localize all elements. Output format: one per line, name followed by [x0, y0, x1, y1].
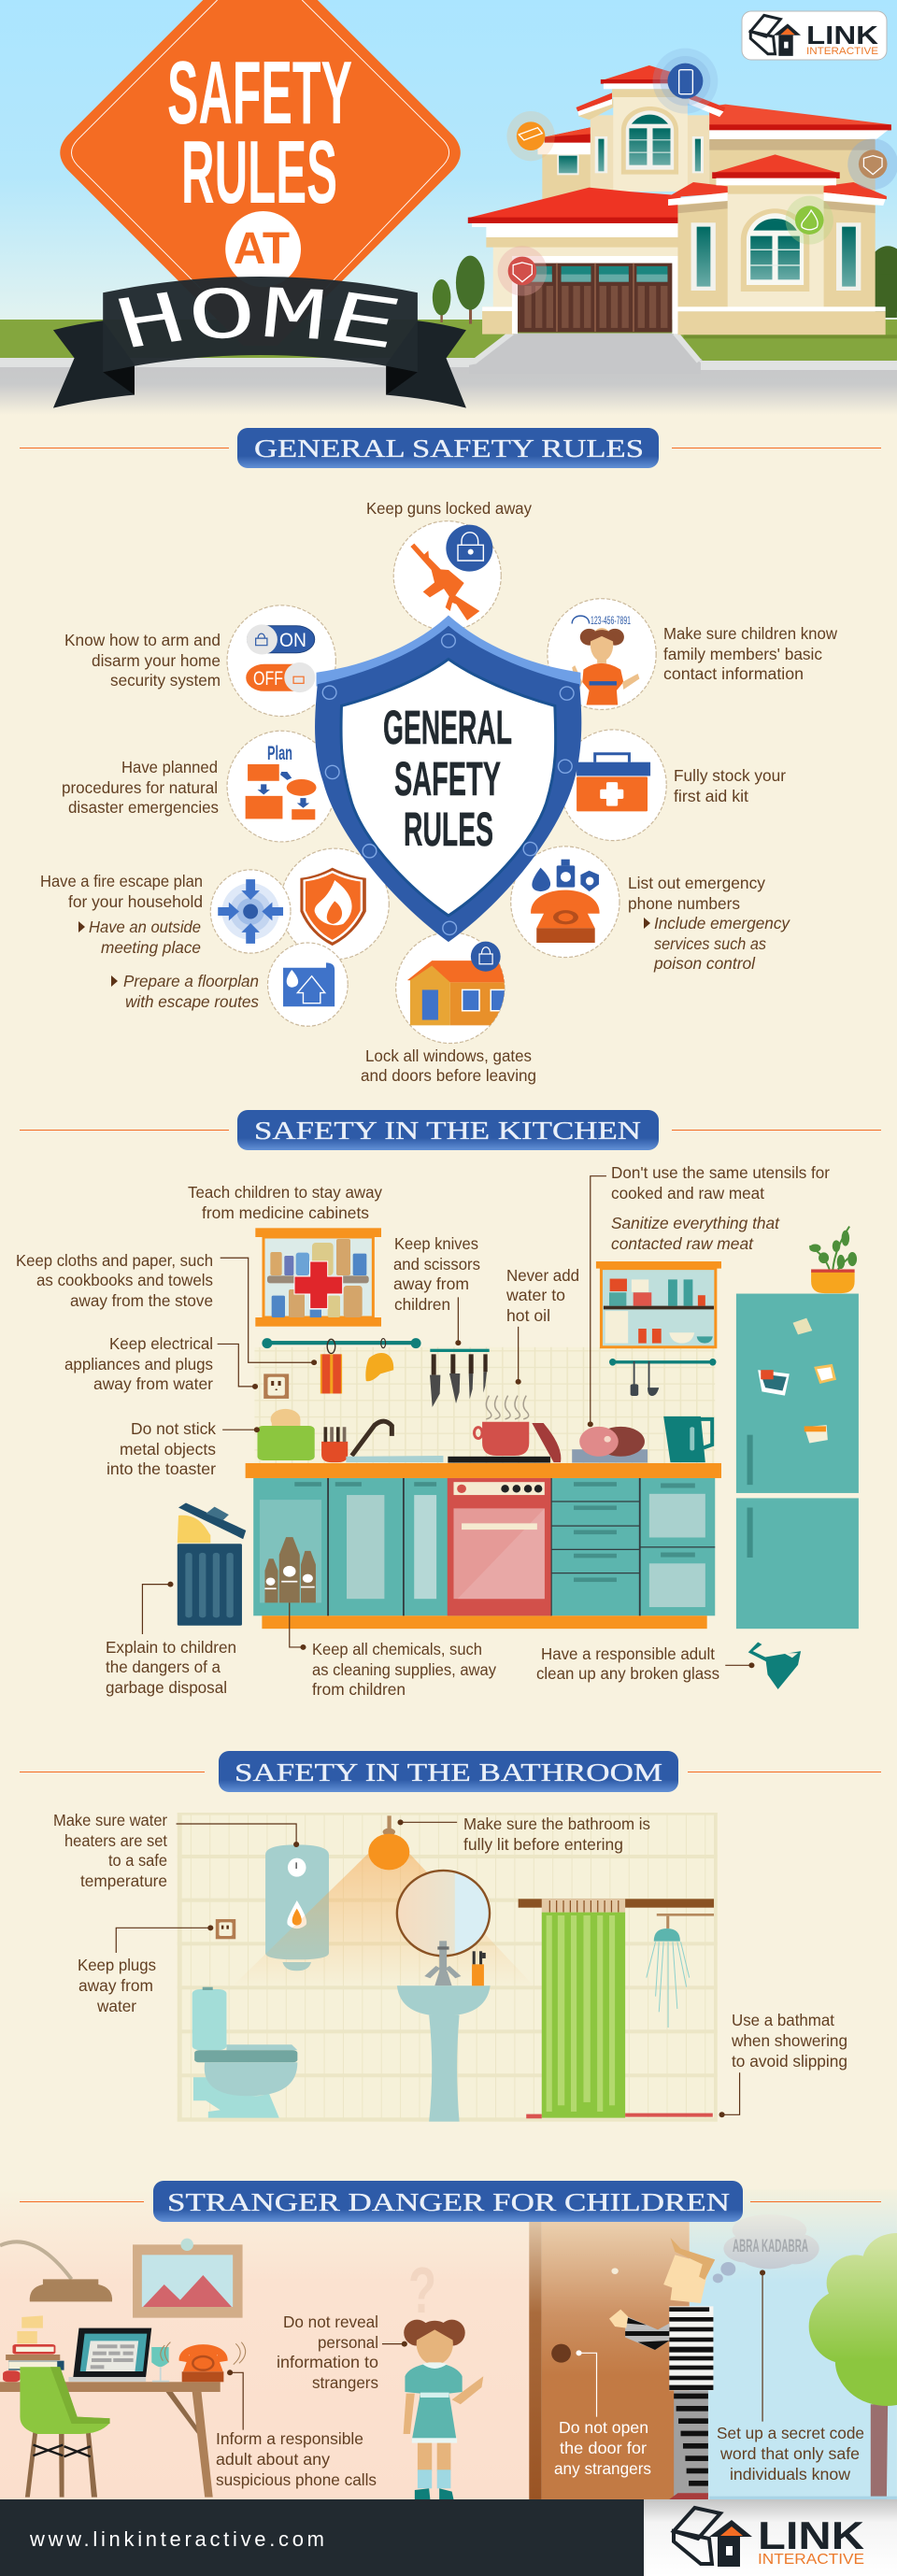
- heading: stranger danger: [20, 2181, 881, 2222]
- text: electrical appliances: Keep electrical: [109, 1334, 213, 1353]
- text: water heaters: Make sure water: [53, 1811, 167, 1829]
- text: do not open the door: Do not open: [559, 2418, 648, 2437]
- text: do not open the door: [554, 2418, 651, 2478]
- tile wall: [254, 1347, 715, 1463]
- panel: kitchen: [16, 1110, 881, 1699]
- icon labels: on off plan phone number: OFF: [253, 668, 283, 690]
- icon labels: on off plan phone number: ON: [279, 630, 306, 651]
- icon: broken glass: [748, 1642, 801, 1689]
- text: emergency phone numbers: [628, 874, 790, 973]
- text: first aid kit: [674, 766, 786, 805]
- icon: phone: [653, 49, 718, 114]
- text: contact information: Make sure children know: [663, 624, 837, 643]
- glass and telephone: [151, 2342, 246, 2382]
- icon: gun locked: [393, 521, 501, 631]
- books and mugs: [3, 2315, 64, 2382]
- knife block and sink: [321, 1421, 443, 1462]
- text: fire escape plan: Have a fire escape plan: [40, 872, 203, 890]
- icon: green fire: [786, 196, 833, 245]
- text: secret code: individuals know: [730, 2465, 850, 2483]
- text: bathmat: when showering: [731, 2031, 847, 2050]
- house: tower: [576, 65, 725, 192]
- text: planned procedures: Have planned: [121, 758, 218, 776]
- icon: first aid kit: [560, 730, 666, 841]
- text: emergency phone numbers: Include emergency: [654, 914, 790, 932]
- text: chemicals: [312, 1640, 496, 1699]
- house: back wing: [537, 127, 600, 203]
- text: bathmat: [731, 2011, 847, 2071]
- road and lawn: [0, 320, 897, 415]
- text: keep plugs: [78, 1956, 156, 2015]
- text: utensils: Sanitize everything that: [611, 1214, 780, 1232]
- title text: safety rules at: [167, 43, 352, 274]
- title text: safety rules at: AT: [234, 224, 290, 274]
- laptop: [68, 2328, 151, 2382]
- text: contact information: contact information: [663, 664, 804, 683]
- mirror: [397, 1871, 490, 1956]
- text: secret code: Set up a secret code: [717, 2424, 864, 2442]
- title text: safety rules at: RULES: [181, 122, 337, 222]
- illustration: bathroom: [116, 1813, 740, 2122]
- text: cloths and paper: away from the stove: [70, 1291, 213, 1310]
- trash can: [178, 1502, 246, 1626]
- wall picture: [133, 2239, 243, 2318]
- text: phone calls: [216, 2429, 377, 2489]
- icon: child with phone number: [548, 599, 656, 709]
- text: chemicals: Keep all chemicals, such: [312, 1640, 482, 1658]
- text: phone calls: adult about any: [216, 2450, 330, 2469]
- text: electrical appliances: away from water: [93, 1374, 213, 1393]
- toothbrush cup: [472, 1951, 486, 1985]
- text: first aid kit: Fully stock your: [674, 766, 786, 785]
- text: personal information: [277, 2313, 378, 2392]
- house: back right wing: [709, 105, 891, 200]
- utensil rail: [609, 1359, 716, 1396]
- panel: bathroom: [20, 1751, 881, 2122]
- text: broken glass: Have a responsible adult: [541, 1644, 715, 1663]
- text: first aid kit: first aid kit: [674, 787, 748, 805]
- text: fire escape plan: [40, 872, 259, 1011]
- text: keep plugs: water: [96, 1997, 136, 2015]
- shower curtain and rod: [519, 1899, 714, 2118]
- text: contact information: [663, 624, 837, 683]
- text: water heaters: to a safe: [108, 1851, 167, 1870]
- text: electrical appliances: appliances and plugs: [64, 1355, 213, 1373]
- title text: safety rules at: SAFETY: [167, 43, 352, 143]
- text: planned procedures: disaster emergencies: [68, 798, 219, 817]
- text: toaster: [107, 1419, 216, 1478]
- poison bottles: [264, 1537, 316, 1602]
- text: fire escape plan: meeting place: [101, 938, 201, 957]
- heading: general safety rules: GENERAL SAFETY RULES: [254, 434, 644, 463]
- icon labels: on off plan phone number: [253, 614, 631, 764]
- text: medicine cabinets: from medicine cabinets: [202, 1203, 369, 1222]
- title diamond: [60, 0, 461, 346]
- text: keep guns locked away: Keep guns locked away: [366, 499, 532, 518]
- text: water heaters: heaters are set: [64, 1831, 167, 1850]
- text: emergency phone numbers: services such as: [654, 934, 766, 953]
- text: chemicals: from children: [312, 1680, 406, 1699]
- text: hot oil: hot oil: [506, 1306, 550, 1325]
- text: hot oil: water to: [505, 1286, 565, 1304]
- illustration: stranger scene: [0, 2189, 897, 2499]
- lamp: [0, 2242, 112, 2301]
- heading: safety in the kitchen: SAFETY IN THE KITCHEN: [254, 1117, 641, 1145]
- text: hot oil: Never add: [506, 1266, 579, 1285]
- text: do not open the door: any strangers: [554, 2459, 651, 2478]
- tiled wall: [178, 1813, 718, 2122]
- text: toaster: into the toaster: [107, 1459, 216, 1478]
- stranger figure: [609, 2238, 715, 2499]
- text: personal information: strangers: [312, 2373, 378, 2392]
- text: lock windows: Lock all windows, gates: [365, 1046, 532, 1065]
- text: water heaters: temperature: [80, 1872, 167, 1890]
- footer: [0, 2499, 897, 2576]
- icon: plan flowchart: [227, 731, 335, 842]
- panel: general safety rules: [20, 428, 881, 1085]
- text: personal information: personal: [318, 2333, 378, 2352]
- shield text: SAFETY: [394, 752, 501, 805]
- medicine cabinet: [255, 1228, 381, 1327]
- text: garbage disposal: Explain to children: [106, 1638, 236, 1657]
- water heater: [265, 1844, 329, 1971]
- text: fire escape plan: for your household: [68, 892, 203, 911]
- text: hot oil: [505, 1266, 579, 1325]
- text: cloths and paper: Keep cloths and paper, such: [16, 1251, 213, 1270]
- text: secret code: [717, 2424, 864, 2483]
- text: arm and disarm: security system: [110, 671, 221, 690]
- text: knives and scissors: children: [394, 1295, 450, 1314]
- text: fire escape plan: Have an outside: [89, 918, 201, 936]
- tree: [809, 2233, 897, 2499]
- heading: safety in the bathroom: SAFETY IN THE BATHROOM: [235, 1758, 662, 1786]
- shield text: GENERAL: [383, 701, 512, 754]
- text: phone calls: Inform a responsible: [216, 2429, 363, 2448]
- ground strip: [709, 2497, 897, 2499]
- icon: camera: [506, 111, 555, 161]
- heading: general safety rules: [20, 428, 881, 468]
- icon: floorplan: [268, 943, 348, 1026]
- icon: fire shield: [280, 848, 389, 960]
- text: keep plugs: Keep plugs: [78, 1956, 156, 1974]
- title ribbon: home: [53, 277, 466, 408]
- icon: red shield: [498, 246, 547, 296]
- potted plant: [809, 1227, 857, 1293]
- illustration: house: [433, 49, 897, 374]
- house: front right block: [629, 139, 887, 334]
- leader lines: [142, 1176, 754, 1668]
- towel rail: [262, 1338, 421, 1393]
- toaster: [257, 1409, 315, 1460]
- counter and cabinets: [246, 1463, 721, 1629]
- text: chemicals: as cleaning supplies, away: [312, 1660, 496, 1679]
- logo: top right: [742, 11, 887, 60]
- footer url: www.linkinteractive.com: [29, 2527, 324, 2551]
- text: bathmat: Use a bathmat: [732, 2011, 834, 2029]
- heading: safety in the kitchen: [20, 1110, 881, 1150]
- bathmat: [526, 2113, 713, 2118]
- text: medicine cabinets: [188, 1183, 382, 1222]
- text: arm and disarm: [64, 631, 221, 690]
- tree: right bush: [865, 246, 897, 318]
- shield text: [383, 701, 512, 856]
- knife rack: [430, 1349, 490, 1407]
- text: toaster: metal objects: [120, 1440, 216, 1459]
- chair: [20, 2367, 110, 2498]
- text: garbage disposal: garbage disposal: [106, 1678, 227, 1697]
- shower head: [647, 1914, 714, 2028]
- text: phone calls: suspicious phone calls: [216, 2470, 377, 2489]
- text: emergency phone numbers: List out emergency: [628, 874, 765, 892]
- text: arm and disarm: Know how to arm and: [64, 631, 221, 649]
- outside background: [690, 2189, 897, 2499]
- house: lower left roof and garage: [468, 188, 681, 334]
- text: bathroom lit: [463, 1815, 650, 1854]
- text: lock windows: and doors before leaving: [361, 1066, 536, 1085]
- icon: house locked: [396, 932, 509, 1044]
- sky: [0, 0, 897, 322]
- icon labels: on off plan phone number: Plan: [267, 743, 292, 764]
- text: electrical appliances: [64, 1334, 213, 1393]
- shield text: RULES: [404, 803, 493, 856]
- logo: footer: INTERACTIVE: [758, 2552, 864, 2568]
- refrigerator: [736, 1294, 859, 1629]
- text: utensils: [611, 1163, 830, 1253]
- outlet: [263, 1373, 289, 1399]
- text: lock windows: [361, 1046, 536, 1085]
- house: driveway: [466, 333, 897, 374]
- kettle: [663, 1416, 712, 1462]
- illustration: kitchen: [142, 1176, 859, 1689]
- text: contact information: family members' basic: [663, 645, 822, 663]
- leader lines: [227, 2270, 765, 2430]
- text: water heaters: [53, 1811, 167, 1890]
- panel: stranger danger: [0, 2181, 897, 2499]
- text: toaster: Do not stick: [131, 1419, 216, 1438]
- text: secret code: word that only safe: [719, 2444, 860, 2463]
- icon: arm and disarm switches: [227, 605, 335, 717]
- stove and pot: [448, 1396, 561, 1463]
- girl with question: [404, 2320, 483, 2499]
- ham on tray: [572, 1427, 648, 1463]
- text: knives and scissors: [393, 1234, 480, 1314]
- trees: small: [433, 256, 485, 324]
- text: fire escape plan: with escape routes: [125, 992, 259, 1011]
- toilet: [192, 1987, 297, 2118]
- question mark: ?: [408, 2254, 436, 2327]
- text: bathroom lit: Make sure the bathroom is: [463, 1815, 650, 1833]
- leader lines: [116, 1819, 740, 2117]
- text: arm and disarm: disarm your home: [92, 651, 221, 670]
- text: broken glass: [536, 1644, 719, 1683]
- text: planned procedures: [62, 758, 219, 817]
- text: utensils: contacted raw meat: [611, 1234, 754, 1253]
- text: bathmat: to avoid slipping: [732, 2052, 847, 2071]
- room background: [0, 2189, 529, 2499]
- title ribbon: home: HOME: [118, 287, 398, 348]
- thought cloud: [713, 2214, 819, 2283]
- text: planned procedures: procedures for natural: [62, 778, 218, 797]
- logo: top right: INTERACTIVE: [806, 46, 878, 57]
- icon: emergency phone: [511, 847, 619, 958]
- text: garbage disposal: the dangers of a: [106, 1658, 221, 1676]
- logo: footer: LINK: [758, 2513, 864, 2557]
- text: personal information: information to: [277, 2353, 378, 2371]
- sink: [397, 1941, 491, 2122]
- oven: [448, 1478, 551, 1615]
- desk: [0, 2382, 221, 2498]
- text: fire escape plan: Prepare a floorplan: [123, 972, 259, 990]
- icon: meeting place target: [210, 870, 291, 953]
- text: emergency phone numbers: phone numbers: [628, 894, 740, 913]
- illustration: circles and shield: [210, 521, 666, 1044]
- logo: footer: [674, 2508, 864, 2568]
- text: keep plugs: away from: [78, 1976, 153, 1995]
- text: cloths and paper: as cookbooks and towels: [36, 1271, 213, 1289]
- icon labels: on off plan phone number: 123-456-7891: [591, 614, 631, 627]
- text: emergency phone numbers: poison control: [653, 954, 756, 973]
- text: medicine cabinets: Teach children to stay away: [188, 1183, 382, 1202]
- text: utensils: cooked and raw meat: [611, 1184, 764, 1203]
- text: knives and scissors: Keep knives: [394, 1234, 478, 1253]
- cloud word: ABRA KADABRA: [733, 2237, 808, 2256]
- text: knives and scissors: and scissors: [393, 1255, 480, 1274]
- door: [529, 2189, 690, 2499]
- text: personal information: Do not reveal: [283, 2313, 378, 2331]
- panel: header: [0, 0, 897, 409]
- text: knives and scissors: away from: [393, 1274, 469, 1293]
- icon: tan shield: [847, 138, 897, 190]
- heading: safety in the bathroom: [20, 1751, 881, 1792]
- shield: [315, 616, 581, 942]
- light beam and bulb: [232, 1815, 534, 1987]
- text: garbage disposal: [106, 1638, 236, 1697]
- heading: stranger danger: STRANGER DANGER FOR CHILDREN: [167, 2188, 730, 2216]
- outlet: [216, 1919, 235, 1939]
- dish shelf: [596, 1261, 721, 1347]
- text: do not open the door: the door for: [560, 2439, 647, 2457]
- text: broken glass: clean up any broken glass: [536, 1664, 719, 1683]
- text: bathroom lit: fully lit before entering: [463, 1835, 623, 1854]
- text: utensils: Don't use the same utensils for: [611, 1163, 830, 1182]
- logo: top right: LINK: [806, 21, 878, 50]
- text: cloths and paper: [16, 1251, 213, 1310]
